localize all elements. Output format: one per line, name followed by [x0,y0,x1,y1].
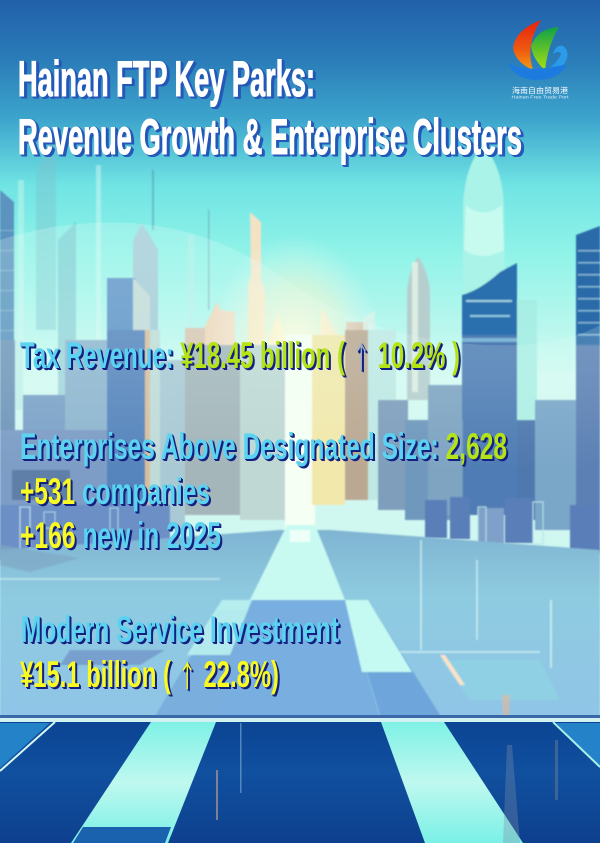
investment heading: Modern Service Investment [21,609,339,650]
right dark tower [462,263,517,510]
icon: green sail [531,27,559,70]
icon: boat hull [508,63,567,80]
central light beam [250,525,345,600]
logo english name: Hainan Free Trade Port [512,94,569,100]
ground tiles [60,650,165,665]
icon: blue wave swirl [545,46,568,72]
title line 1: Hainan FTP Key Parks: [18,51,315,107]
bullet tower [463,145,505,300]
new in 2025: +166 new in 2025 [20,515,221,556]
central road blue panel [216,600,380,718]
left strip [154,610,250,718]
center-left tower [133,224,158,400]
investment value: ¥15.1 billion ( ↑ 22.8%) [20,652,279,696]
title [18,51,522,165]
far left glass towers [18,125,210,400]
left building cluster [0,340,15,510]
companies added: +531 companies [20,471,210,512]
right light strip [381,722,523,843]
background: perspective ground [0,525,600,720]
right strip [345,600,442,718]
logo: Hainan Free Trade Port [508,20,569,100]
left edge tower [0,190,14,560]
central warm towers [248,212,265,480]
stat: enterprises above designated size [20,426,507,556]
central glow [210,235,380,455]
background: dark reflective floor [0,715,600,843]
stat: tax revenue: Tax Revenue: ¥18.45 billion ( ↑ 10.2% ) [20,333,460,377]
icon: red sail [513,20,541,70]
rocket tower [407,257,430,400]
logo chinese name: 海南自由贸易港 [512,85,569,96]
lower warm and bright bands [160,360,185,530]
background: translucent wave overlay [0,223,600,470]
far right tower [576,226,600,520]
left light strip [71,722,216,843]
right building cluster [378,400,408,510]
background: city skyline [0,125,600,567]
stat: modern service investment [20,609,339,696]
